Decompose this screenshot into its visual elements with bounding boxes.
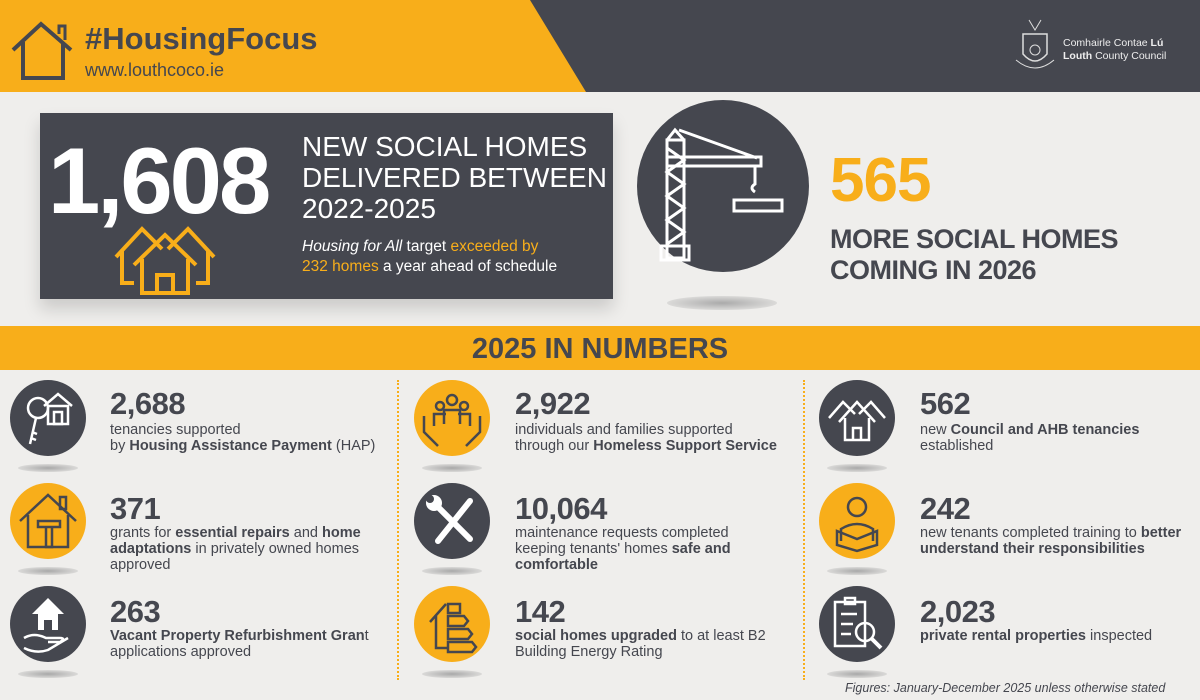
title: #HousingFocus: [85, 21, 318, 56]
item: 371 grants: [10, 483, 361, 575]
item: 10,064 maintenance: [414, 483, 731, 575]
item: 242 training: [819, 483, 1181, 575]
subtext: Housing for All target exceeded by: [302, 238, 538, 255]
item: 371 grants: 371: [110, 491, 160, 526]
item: 242 training: 242: [920, 491, 970, 526]
big number 1,608: 1,608: [48, 128, 268, 233]
item: 242 training: understand their responsibilities: [920, 541, 1145, 557]
item: 142 upgraded: social homes upgraded to at least B2: [515, 628, 766, 644]
icon: crane circle: [637, 100, 809, 310]
item: 2,922 homeless: [414, 380, 777, 472]
footnote: Figures: January-December 2025 unless otherwise stated: [845, 681, 1165, 695]
subtext: [302, 238, 557, 275]
stat: 565: [830, 146, 1118, 285]
item: 2,023 inspected: 2,023: [920, 594, 995, 629]
item: 263 vacant: [10, 586, 369, 678]
item: 562 tenancies: [819, 380, 1139, 472]
item: 10,064 maintenance: keeping tenants' homes safe and: [515, 541, 731, 557]
logo: Louth County Council: [1016, 20, 1166, 68]
item: 371 grants: grants for essential repairs and home: [110, 525, 361, 541]
item: 2,922 homeless: 2,922: [515, 386, 590, 421]
item: 10,064 maintenance: comfortable: [515, 557, 598, 573]
stat: 565: MORE SOCIAL HOMES: [830, 224, 1118, 254]
item: 142 upgraded: 142: [515, 594, 565, 629]
item: 263 vacant: applications approved: [110, 644, 251, 660]
item: 2,688 HAP: [10, 380, 375, 472]
item: 562 tenancies: 562: [920, 386, 970, 421]
item: 2,023 inspected: [819, 586, 1152, 678]
item: 2,922 homeless: through our Homeless Support Service: [515, 438, 777, 454]
item: 562 tenancies: established: [920, 438, 993, 454]
item: 371 grants: adaptations in privately owned homes: [110, 541, 359, 557]
item: 2,688 HAP: tenancies supported: [110, 422, 241, 438]
item: 2,688 HAP: by Housing Assistance Payment (HAP): [110, 438, 375, 454]
stat: 565: 565: [830, 146, 930, 215]
section banner: [0, 326, 1200, 370]
item: 142 upgraded: Building Energy Rating: [515, 644, 663, 660]
item: 242 training: new tenants completed training to better: [920, 525, 1181, 541]
item: 562 tenancies: new Council and AHB tenancies: [920, 422, 1139, 438]
item: 2,023 inspected: private rental properties inspected: [920, 628, 1152, 644]
icon: houses: [114, 226, 216, 295]
stat: 565: COMING IN 2026: [830, 255, 1036, 285]
item: 10,064 maintenance: maintenance requests completed: [515, 525, 729, 541]
icon: house outline: [12, 21, 72, 80]
heading text: 2022-2025: [302, 193, 436, 224]
item: 2,688 HAP: 2,688: [110, 386, 185, 421]
panel: 1,608 homes: [40, 113, 613, 299]
header band: [0, 0, 1200, 92]
heading text: DELIVERED BETWEEN: [302, 162, 607, 193]
heading text: [302, 131, 607, 224]
item: 142 upgraded: [414, 586, 766, 678]
item: 10,064 maintenance: 10,064: [515, 491, 607, 526]
logo: Louth County Council: Louth County Council: [1063, 50, 1166, 62]
item: 263 vacant: 263: [110, 594, 160, 629]
heading text: NEW SOCIAL HOMES: [302, 131, 587, 162]
item: 2,922 homeless: individuals and families supported: [515, 422, 733, 438]
item: 371 grants: approved: [110, 557, 170, 573]
item: 263 vacant: Vacant Property Refurbishment Grant: [110, 628, 369, 644]
logo: Louth County Council: Comhairle Contae Lú: [1063, 37, 1163, 49]
subtext: 232 homes a year ahead of schedule: [302, 258, 557, 275]
section banner: 2025 IN NUMBERS: [472, 333, 728, 365]
website: www.louthcoco.ie: [85, 60, 224, 80]
